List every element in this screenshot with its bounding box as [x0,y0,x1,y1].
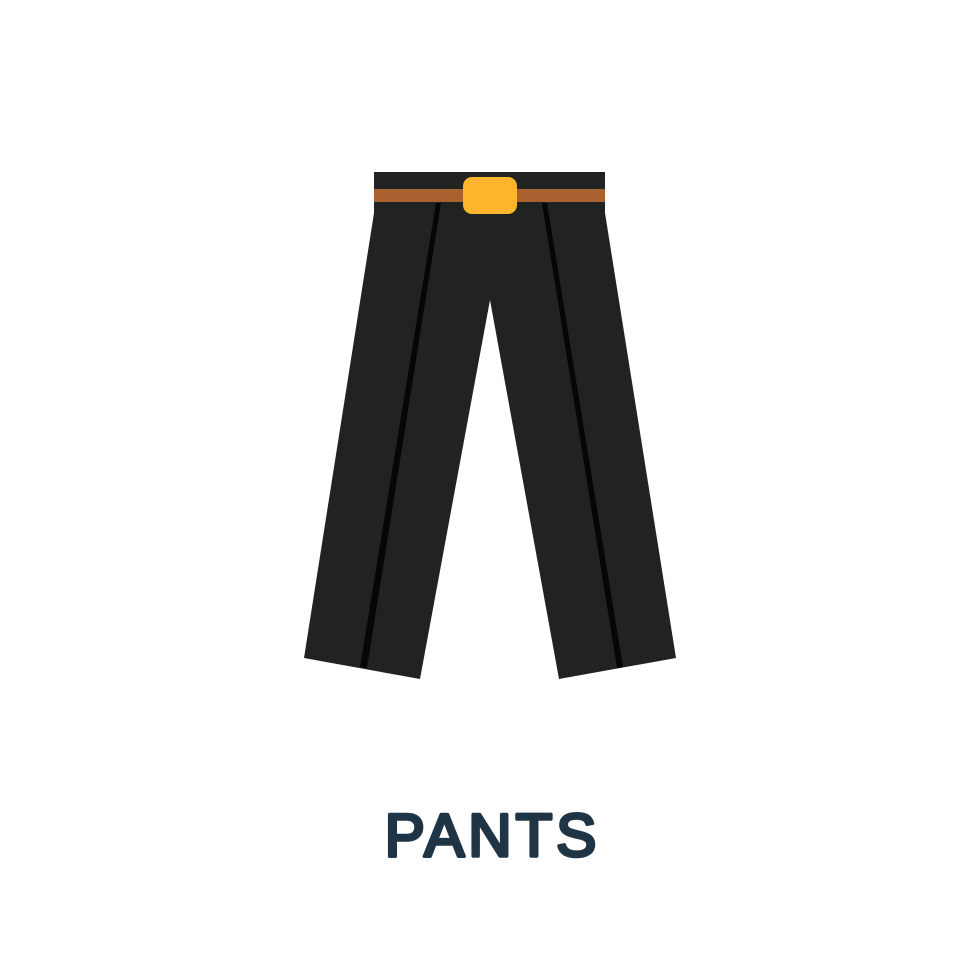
title: PANTS [385,802,600,869]
trouser legs and waistband [304,172,676,679]
right leg crease [542,203,623,668]
belt buckle [463,177,517,214]
icon: pants [304,172,676,679]
belt [374,189,605,202]
left leg crease [360,203,441,668]
